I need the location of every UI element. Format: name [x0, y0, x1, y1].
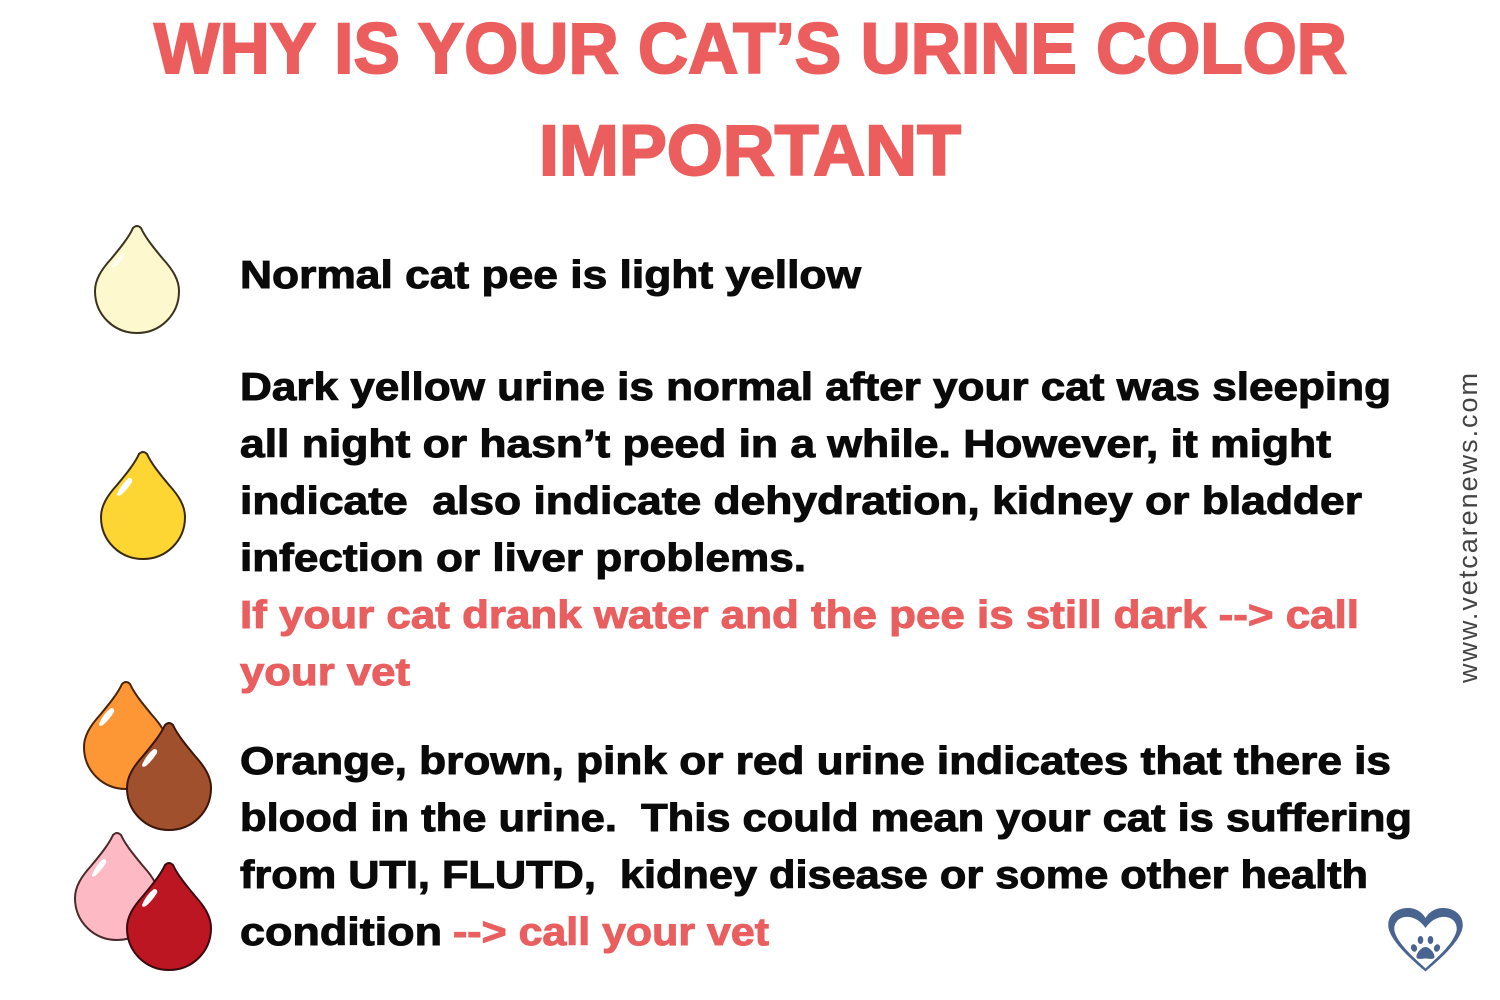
text block: dark yellow urine: all night or hasn’t peed in a while. However, it might [240, 423, 1331, 466]
text block: dark yellow urine: indicate also indicate dehydration, kidney or bladder [240, 480, 1362, 523]
callout: dark urine warning: your vet [240, 651, 410, 694]
text block: blood in urine: Orange, brown, pink or red urine indicates that there is [240, 740, 1391, 783]
website credit: www.vetcarenews.com [1453, 373, 1483, 684]
callout: dark urine warning: If your cat drank water and the pee is still dark --> call [240, 594, 1359, 637]
text block: dark yellow urine: Dark yellow urine is normal after your cat was sleeping [240, 366, 1391, 409]
title: WHY IS YOUR CAT’S URINE COLOR [154, 10, 1347, 89]
icon: light yellow drop [95, 226, 179, 333]
icon: pink drop [75, 833, 159, 940]
callout: dark urine warning [240, 594, 1359, 694]
callout: call your vet: --> call your vet [453, 911, 769, 954]
text block: blood in urine: condition [240, 911, 442, 954]
icon: brown drop [127, 723, 211, 830]
icon: heart with paw logo [1388, 908, 1463, 972]
title [154, 10, 1347, 191]
icon: red drop [127, 863, 211, 970]
text block: blood in urine: blood in the urine. This could mean your cat is suffering [240, 797, 1412, 840]
text block: normal urine: Normal cat pee is light yellow [240, 254, 862, 297]
text block: blood in urine: from UTI, FLUTD, kidney disease or some other health [240, 854, 1368, 897]
text block: dark yellow urine: infection or liver problems. [240, 537, 806, 580]
icon: dark yellow drop [101, 452, 185, 559]
icon: orange drop [84, 682, 168, 789]
text block: dark yellow urine [240, 366, 1391, 580]
text block: blood in urine [240, 740, 1412, 954]
title: IMPORTANT [539, 112, 961, 191]
